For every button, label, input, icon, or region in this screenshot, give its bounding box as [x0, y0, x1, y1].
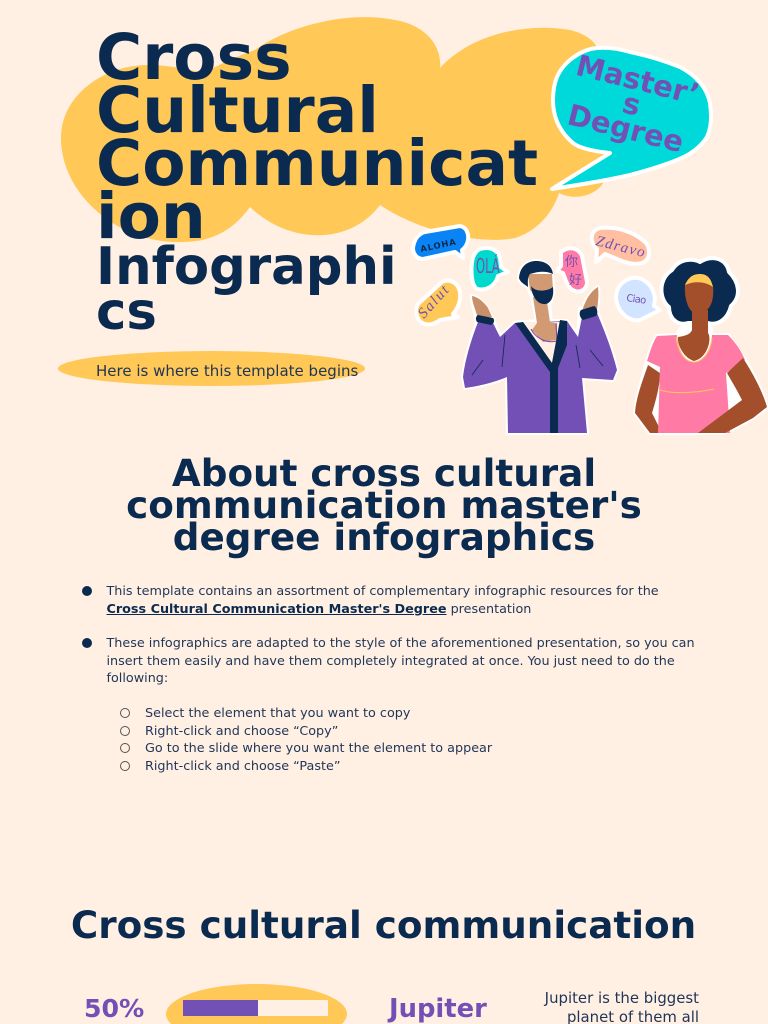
bullet dot 1: [82, 586, 92, 596]
man: cardigan: [463, 313, 617, 433]
speech bubble: Master's Degree: [552, 48, 711, 189]
woman: white sticker outline: [635, 310, 767, 433]
paragraph 1: This template contains an assortment of complementary infographic resources for the: [106, 584, 659, 599]
subtitle: Here is where this template begins: [96, 362, 358, 380]
paragraph 1: [106, 584, 659, 617]
bubble: Zdravo: [592, 228, 649, 264]
man: sleeve folds: [472, 335, 603, 375]
title: ion: [96, 180, 206, 253]
bubble: Ciao: [616, 278, 660, 320]
bubble: Salut: Salut: [415, 282, 453, 322]
woman: face: [685, 281, 713, 313]
paragraph 2: [106, 636, 695, 686]
paragraph 2: These infographics are adapted to the style of the aforementioned presentation, so you can: [106, 636, 695, 651]
sub-list: Right-click and choose “Copy”: [145, 724, 338, 739]
woman: shirt: [647, 335, 745, 433]
bubble: Aloha: [413, 226, 468, 259]
man: collar and placket: [515, 320, 567, 433]
bubble: nihao: [557, 248, 587, 292]
paragraph 2: following:: [106, 671, 168, 686]
title: cs: [96, 282, 157, 342]
label: Jupiter: Jupiter: [389, 994, 487, 1024]
sub-list: [120, 706, 492, 774]
bubble: Ola: OLÁ: [476, 255, 500, 278]
man: face: [528, 274, 553, 300]
bar track and fill: [183, 1000, 328, 1016]
bullet dot 2: [82, 638, 92, 648]
man character: [463, 261, 617, 433]
man: hands: [472, 287, 598, 319]
bubble: Ola: [472, 248, 508, 289]
description: Jupiter: [544, 989, 699, 1024]
Master's Degree bubble text: Degree: [564, 98, 687, 159]
woman: neck and chest: [678, 310, 709, 361]
progress bar in yellow ellipse: [166, 984, 347, 1024]
title: Cultural: [96, 74, 379, 147]
woman: right arm: [698, 358, 767, 433]
woman: left arm: [635, 365, 662, 433]
paragraph 2: insert them easily and have them completely integrated at once. You just need to do the: [106, 654, 675, 669]
title: [96, 21, 538, 342]
man: hair: [519, 261, 553, 287]
woman character: [635, 258, 767, 433]
bubble: nihao: 你: [565, 251, 578, 270]
bubble: nihao: 好: [569, 269, 582, 288]
title: Communicat: [96, 127, 538, 200]
description: Jupiter: Jupiter is the biggest: [545, 989, 699, 1007]
Master's Degree bubble text: [564, 48, 703, 159]
woman: hair: [661, 258, 738, 324]
woman: neckline trim: [660, 337, 714, 393]
section heading: About: [126, 451, 642, 559]
man: beard: [531, 286, 553, 304]
man: necklace: [531, 324, 557, 342]
section heading: About: degree infographics: [173, 515, 595, 559]
yellow cloud blob: [61, 17, 605, 242]
man: cuffs: [476, 306, 597, 325]
sub-list: Right-click and choose “Paste”: [145, 759, 340, 774]
bullet list: [82, 584, 695, 774]
hero illustration: cloud, speech bubbles and people: [61, 17, 768, 435]
stat: 50%: 50%: [84, 994, 144, 1023]
title: Cross: [96, 21, 292, 94]
section heading: About: communication master's: [126, 483, 642, 527]
man: neck: [532, 297, 557, 342]
bubble: Zdravo: Zdravo: [594, 233, 647, 261]
Master's Degree bubble text: s: [619, 86, 644, 123]
man: shirt: [523, 322, 560, 363]
sub-list: Select the element that you want to copy: [145, 706, 410, 721]
paragraph 1: Cross Cultural Communication Master's Degree presentation: [106, 602, 531, 617]
Master's Degree bubble text: Master’: [573, 48, 703, 112]
subtitle pill: [58, 351, 365, 386]
bubble: Ciao: Ciao: [626, 293, 647, 307]
section heading: Cross cultural communication: Cross cultural communication: [71, 903, 696, 947]
sub-list: Go to the slide where you want the element to appear: [145, 741, 492, 756]
bubble: Aloha: ALOHA: [420, 238, 457, 255]
woman: headband: [685, 274, 713, 287]
man: white sticker outline: [463, 261, 617, 433]
title: Infographi: [96, 237, 397, 297]
section heading: About: About cross cultural: [172, 451, 596, 495]
